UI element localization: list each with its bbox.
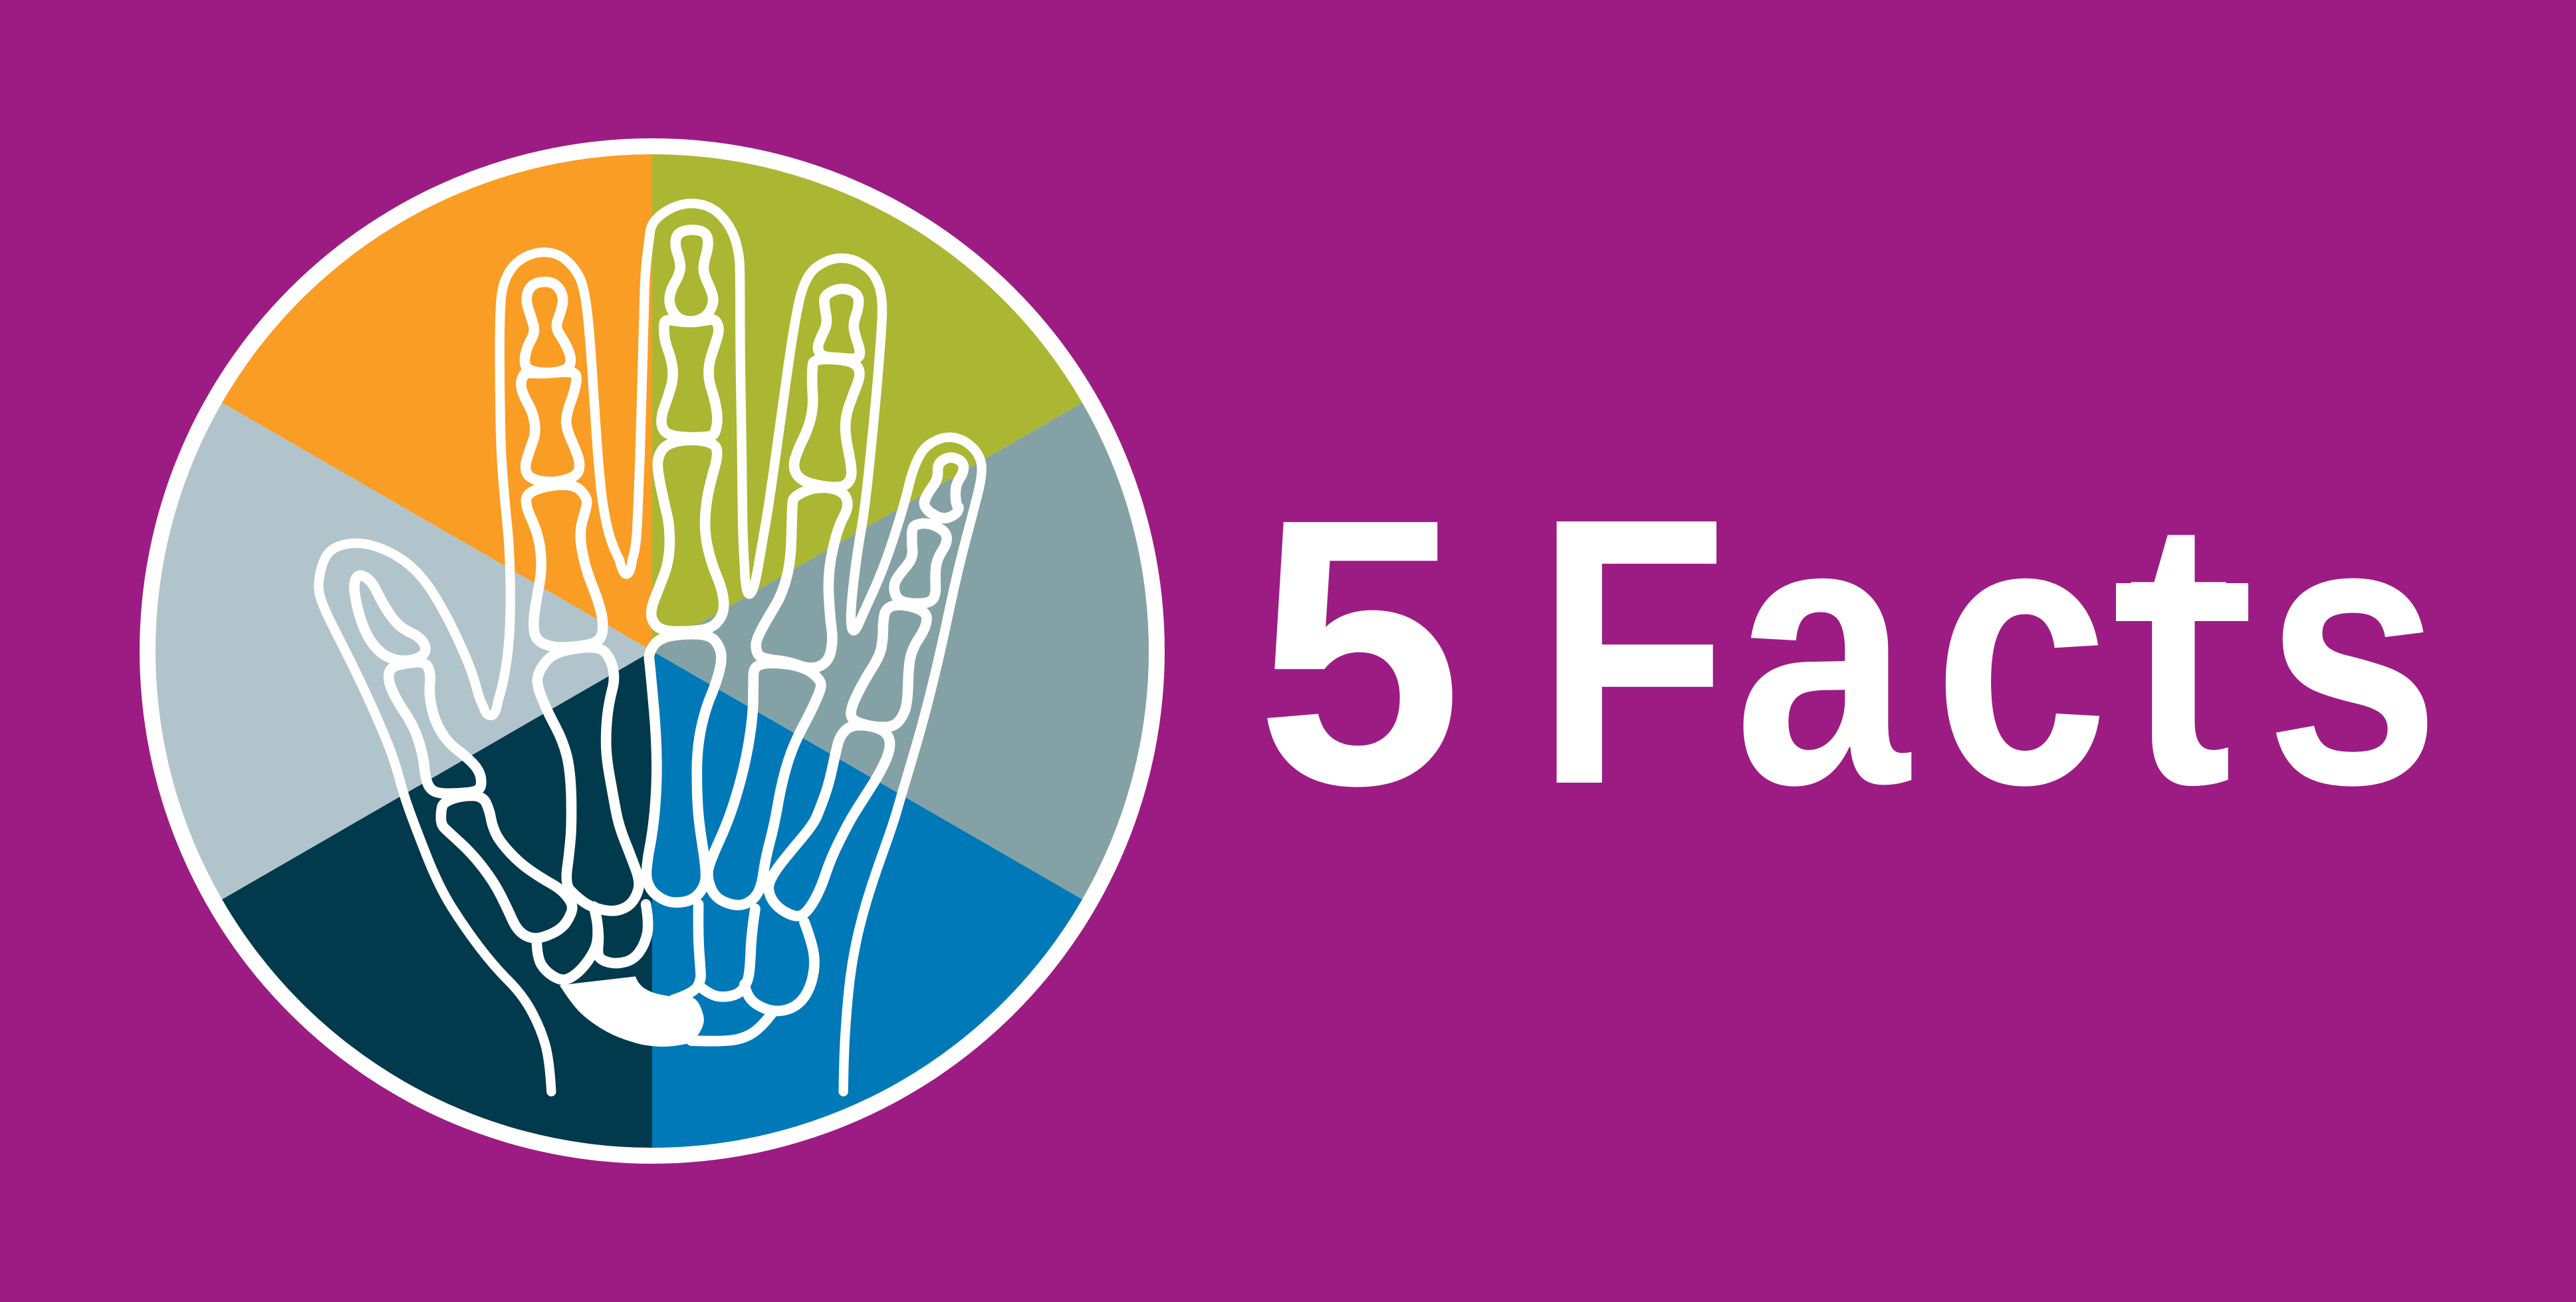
- hamate: [703, 909, 755, 997]
- trapezium: [536, 906, 598, 979]
- word: Facts: [1536, 440, 2440, 864]
- distal phalanx: [669, 229, 713, 321]
- wrist bones: [536, 904, 814, 1047]
- metacarpal: [708, 663, 821, 905]
- sector: olive: [652, 154, 1082, 651]
- metacarpal: [537, 648, 639, 911]
- finger 3 bones: [647, 229, 724, 902]
- middle phalanx: [521, 372, 580, 482]
- icon: hand skeleton: [318, 203, 982, 1092]
- lunate solid: [560, 976, 704, 1047]
- distal phalanx: [354, 575, 425, 660]
- finger 2 bones: [521, 282, 639, 911]
- middle phalanx: [794, 359, 860, 487]
- sector: orange: [222, 154, 652, 651]
- numeral: 5: [1256, 440, 1463, 864]
- capitate: [673, 904, 701, 999]
- distal phalanx: [818, 289, 860, 358]
- distal phalanx: [924, 457, 963, 518]
- proximal phalanx: [651, 440, 724, 632]
- sector: dark navy: [222, 651, 652, 1148]
- proximal phalanx: [756, 487, 848, 668]
- hand outline: [318, 203, 982, 1092]
- metacarpal: [647, 634, 721, 902]
- metacarpal: [441, 796, 572, 938]
- pie badge: [140, 138, 1165, 1164]
- finger 4 bones: [708, 289, 860, 905]
- title: 5 Facts: [1256, 440, 2440, 864]
- proximal phalanx: [389, 662, 481, 793]
- metacarpal: [768, 725, 890, 916]
- trapezoid: [596, 904, 648, 964]
- middle phalanx: [894, 523, 947, 604]
- distal phalanx: [525, 282, 570, 373]
- proximal phalanx: [526, 485, 603, 647]
- white ring: [140, 138, 1165, 1164]
- thumb bones: [354, 575, 572, 938]
- sector: light grey: [156, 403, 652, 899]
- sector: blue: [652, 651, 1082, 1148]
- middle phalanx: [661, 320, 719, 438]
- pisiform arc: [691, 1013, 772, 1041]
- sector: grey teal: [652, 403, 1149, 899]
- proximal phalanx: [851, 605, 927, 727]
- letter t crossbar: [2116, 583, 2248, 621]
- triquetrum: [745, 922, 814, 1011]
- finger 5 bones: [768, 457, 963, 916]
